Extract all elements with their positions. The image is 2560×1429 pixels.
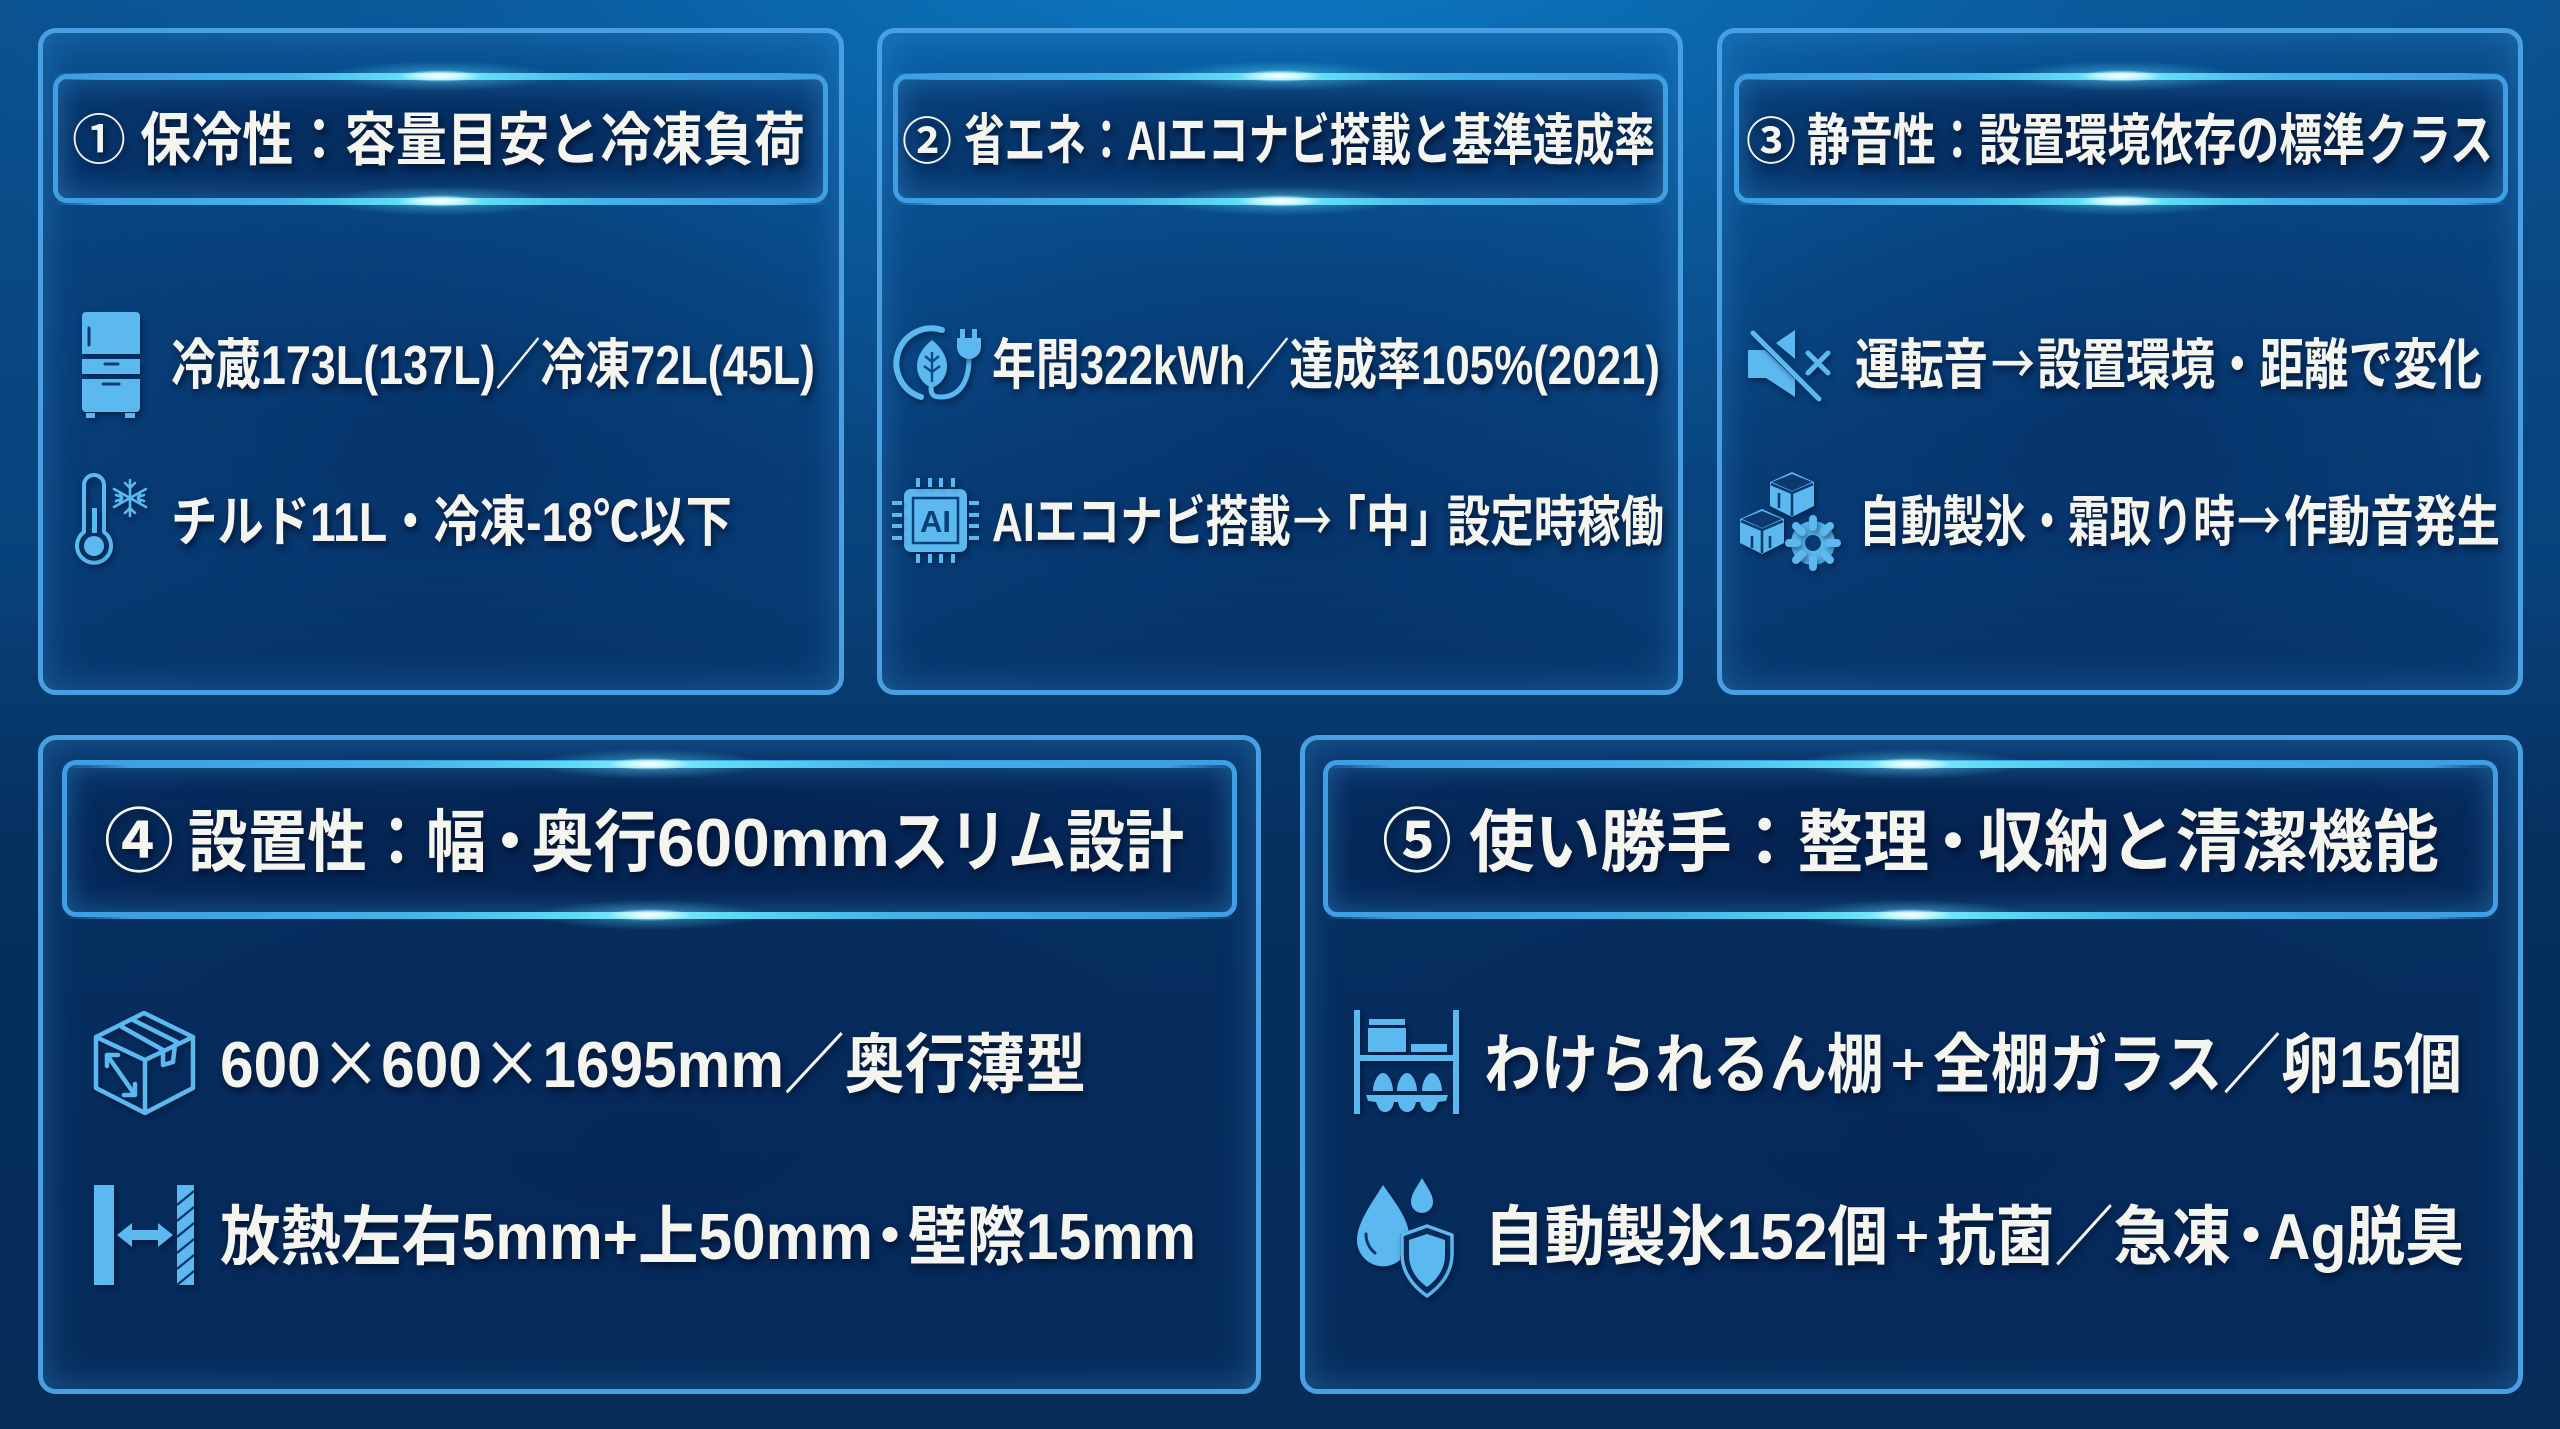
text: ice making and defrost: 自動製氷・霜取り時 xyxy=(1859,491,2235,553)
heading 5: ・ xyxy=(1919,787,1987,886)
text: AI eco navi: → xyxy=(1293,477,1332,557)
text: AI eco navi: AIエコナビ搭載 xyxy=(992,491,1291,553)
text: ice, antibacterial, deodorant: 抗菌／急凍 xyxy=(1937,1200,2231,1273)
text: operating sound xyxy=(1855,320,2482,400)
panel: 2 energy saving xyxy=(877,28,1683,695)
glow: header 1 top xyxy=(53,61,828,91)
heading 1: 保冷性：容量目安と冷凍負荷 xyxy=(140,108,805,173)
header: 1 cold retention xyxy=(53,74,828,203)
glow: header 3 bottom xyxy=(1734,186,2508,216)
heading 1 xyxy=(72,96,805,175)
panel: 4 installation xyxy=(38,735,1261,1394)
text: ice, antibacterial, deodorant: ・ xyxy=(2218,1184,2284,1278)
text: heat clearance: 壁際15mm xyxy=(908,1200,1196,1273)
panel 3 contents xyxy=(1740,102,2504,576)
text: ice, antibacterial, deodorant xyxy=(1484,1184,2464,1278)
panel: 3 quietness xyxy=(1717,28,2523,695)
heading 4: ④ xyxy=(104,786,174,887)
heading 2: ② xyxy=(902,102,952,174)
heading 3: ③ xyxy=(1746,102,1796,174)
heading 4: 奥行 xyxy=(531,805,657,881)
text: operating sound: 運転音 xyxy=(1855,334,1988,396)
heading 4: 設置性：幅 xyxy=(188,805,486,881)
glow: header 4 top xyxy=(62,749,1237,779)
text: heat clearance: ・ xyxy=(857,1184,923,1278)
text: ice making and defrost: 作動音発生 xyxy=(2284,491,2500,553)
icon: thermometer and snowflake xyxy=(77,475,146,563)
header: 4 installation xyxy=(62,760,1237,917)
heading 5: 収納と清潔機能 xyxy=(1978,805,2439,881)
icon: AI chip xyxy=(892,478,979,563)
panel: 5 usability xyxy=(1300,735,2523,1394)
heading 4: スリム設計 xyxy=(890,805,1184,881)
heading 1: ① xyxy=(72,96,126,175)
glow: header 3 top xyxy=(1734,61,2508,91)
glow: header 5 top xyxy=(1323,749,2498,779)
text: ice making and defrost: → xyxy=(2237,477,2281,557)
icon: muted speaker xyxy=(1748,330,1828,399)
panel 4 contents xyxy=(94,786,1198,1290)
text: dimensions: 600×600×1695mm／奥行薄型 xyxy=(220,1012,1086,1106)
heading 2: 省エネ：AIエコナビ搭載と基準達成率 xyxy=(964,109,1655,172)
panel 5 contents xyxy=(1354,786,2465,1301)
heading 5: ⑤ xyxy=(1382,786,1452,887)
text: ice, antibacterial, deodorant: + xyxy=(1895,1190,1929,1277)
text: ice making and defrost xyxy=(1859,477,2500,557)
header: 3 quietness xyxy=(1734,74,2508,203)
icon: ice cubes and gear xyxy=(1740,472,1837,567)
icon: eco leaf and plug xyxy=(896,328,981,397)
text: AI eco navi: 「中」 xyxy=(1322,491,1454,553)
text: AI eco navi: 設定時稼働 xyxy=(1447,491,1664,553)
heading 5 xyxy=(1382,786,2439,887)
text: heat clearance: 放熱左右5mm+上50mm xyxy=(220,1200,873,1273)
heading 4: 600mm xyxy=(657,805,890,881)
heading 2 xyxy=(902,102,1655,174)
text: shelves and eggs: 全棚ガラス／卵15個 xyxy=(1933,1028,2462,1101)
text: shelves and eggs: わけられるん棚 xyxy=(1484,1028,1884,1101)
text: fridge capacity: 冷蔵173L(137L)／冷凍72L(45L) xyxy=(171,334,815,396)
panel 1 contents xyxy=(72,96,820,570)
glow: header 1 bottom xyxy=(53,186,828,216)
panel: 1 cold retention xyxy=(38,28,844,695)
icon: AI chip: AI xyxy=(920,504,951,539)
glow: header 4 bottom xyxy=(62,900,1237,930)
text: chilled and frozen: チルド11L・冷凍-18℃以下 xyxy=(171,491,732,553)
glow: header 2 bottom xyxy=(893,186,1668,216)
icon: box with arrow xyxy=(96,1013,193,1113)
header: 2 energy saving xyxy=(893,74,1668,203)
text: AI eco navi xyxy=(992,477,1664,557)
text: annual power: 年間322kWh／達成率105%(2021) xyxy=(992,334,1660,396)
heading 5: 使い勝手：整理 xyxy=(1469,805,1929,881)
icon: droplets and shield xyxy=(1357,1178,1454,1298)
glow: header 5 bottom xyxy=(1323,900,2498,930)
header: 5 usability xyxy=(1323,760,2498,917)
icon: clearance to wall xyxy=(94,1185,194,1285)
text: ice, antibacterial, deodorant: Ag脱臭 xyxy=(2268,1200,2464,1273)
panel 2 contents xyxy=(892,102,1834,567)
text: shelves and eggs: + xyxy=(1891,1018,1925,1105)
icon: refrigerator xyxy=(82,312,140,418)
text: operating sound: → xyxy=(1991,320,2035,400)
heading 4 xyxy=(104,786,1184,887)
glow: header 2 top xyxy=(893,61,1668,91)
text: shelves and eggs xyxy=(1484,1018,2462,1105)
icon: shelf and eggs xyxy=(1354,1010,1459,1114)
heading 4: ・ xyxy=(476,787,544,886)
text: heat clearance xyxy=(220,1184,1196,1278)
text: ice, antibacterial, deodorant: 自動製氷152個 xyxy=(1484,1200,1888,1273)
